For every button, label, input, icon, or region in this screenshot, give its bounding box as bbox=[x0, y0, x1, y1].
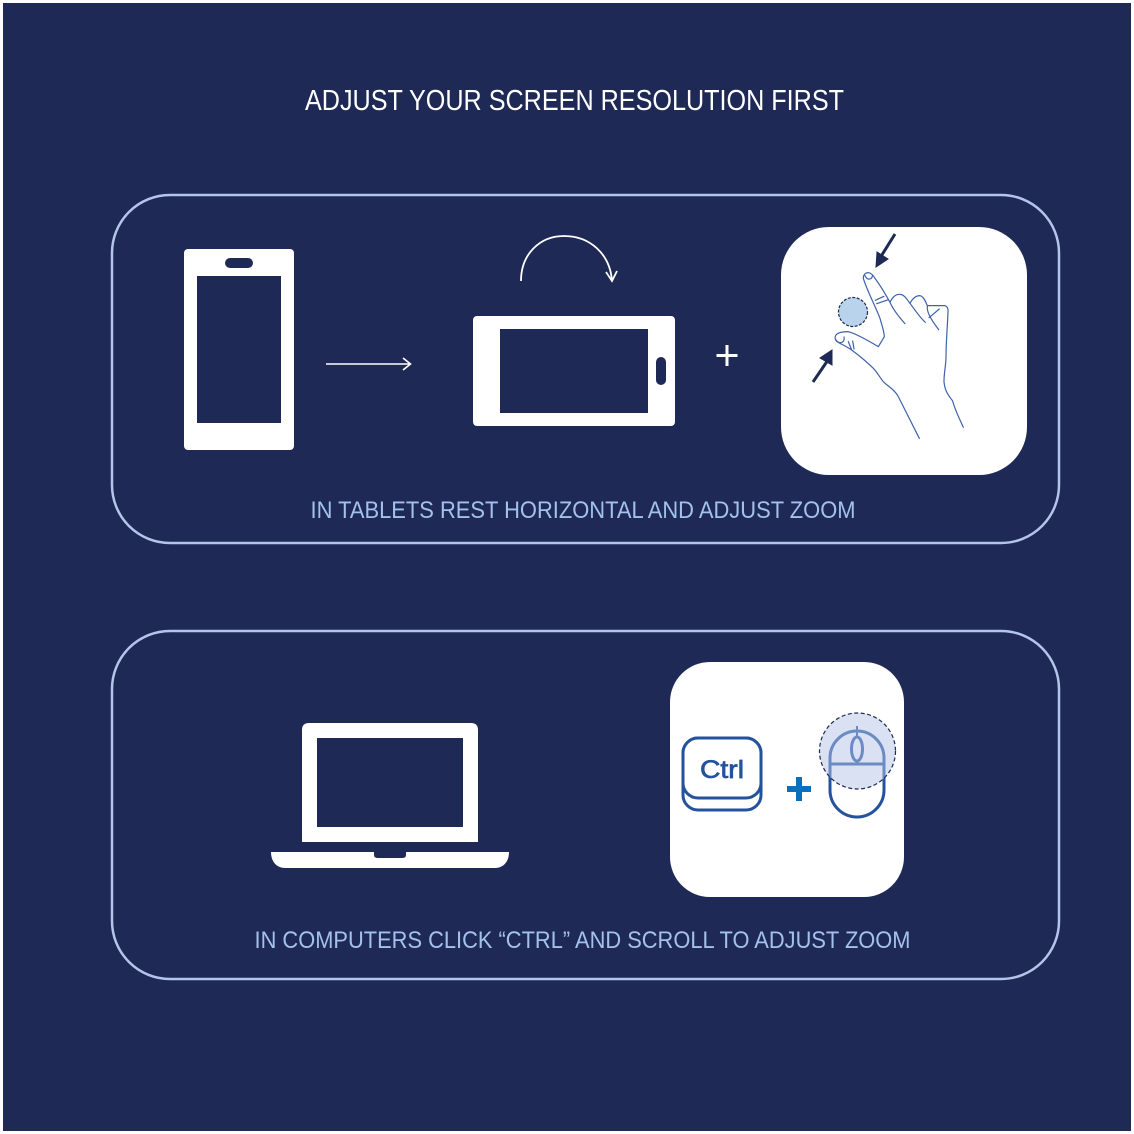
zoom target circle bbox=[838, 298, 868, 326]
plus sign blue bbox=[787, 777, 811, 801]
ctrl key bbox=[683, 738, 761, 810]
scroll highlight bbox=[820, 713, 896, 789]
icon: ctrl plus scroll card bbox=[670, 662, 904, 897]
pinch arrow top bbox=[876, 234, 895, 267]
panel outline: tablets bbox=[112, 195, 1059, 543]
hand outline bbox=[835, 273, 963, 438]
panel: tablets bbox=[112, 195, 1059, 543]
panel: computers bbox=[112, 631, 1059, 979]
caption: tablets: IN TABLETS REST HORIZONTAL AND ADJUST ZOOM bbox=[310, 497, 856, 524]
icon: rotate arrow bbox=[521, 236, 617, 281]
icon: vertical tablet bbox=[184, 249, 294, 450]
mouse bbox=[830, 726, 884, 817]
arrow: tablet to horizontal bbox=[326, 358, 410, 370]
caption: computers: IN COMPUTERS CLICK “CTRL” AND SCROLL TO ADJUST ZOOM bbox=[254, 927, 910, 954]
icon: horizontal tablet bbox=[473, 316, 675, 426]
panel outline: computers bbox=[112, 631, 1059, 979]
ctrl key: Ctrl bbox=[700, 756, 744, 784]
pinch arrow bottom bbox=[813, 350, 832, 382]
title: ADJUST YOUR SCREEN RESOLUTION FIRST bbox=[305, 85, 844, 117]
plus sign bbox=[716, 345, 738, 366]
icon: laptop bbox=[271, 723, 509, 868]
icon: pinch zoom card bbox=[781, 227, 1027, 475]
